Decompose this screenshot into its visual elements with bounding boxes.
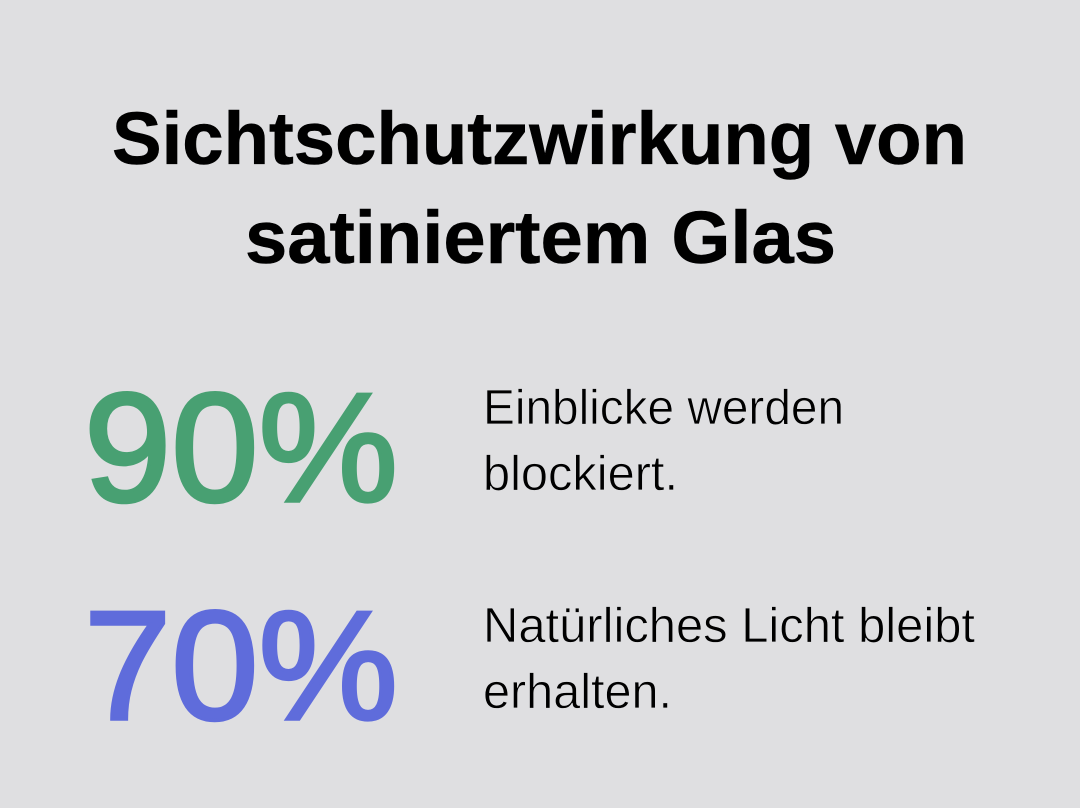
title: satiniertem Glas — [245, 196, 836, 279]
stat description natural light — [483, 599, 975, 719]
stat description natural light: erhalten. — [483, 665, 672, 719]
stat description blocked views: blockiert. — [483, 447, 678, 501]
stat description blocked views — [483, 381, 844, 501]
title: Sichtschutzwirkung von — [112, 97, 967, 180]
title — [112, 97, 967, 279]
stat: 90 percent — [84, 361, 844, 534]
stat description blocked views: Einblicke werden — [483, 381, 844, 435]
stat: 70 percent — [84, 579, 975, 752]
stat value 90%: 90% — [84, 361, 398, 534]
stat value 70%: 70% — [84, 579, 398, 752]
stat description natural light: Natürliches Licht bleibt — [483, 599, 975, 653]
